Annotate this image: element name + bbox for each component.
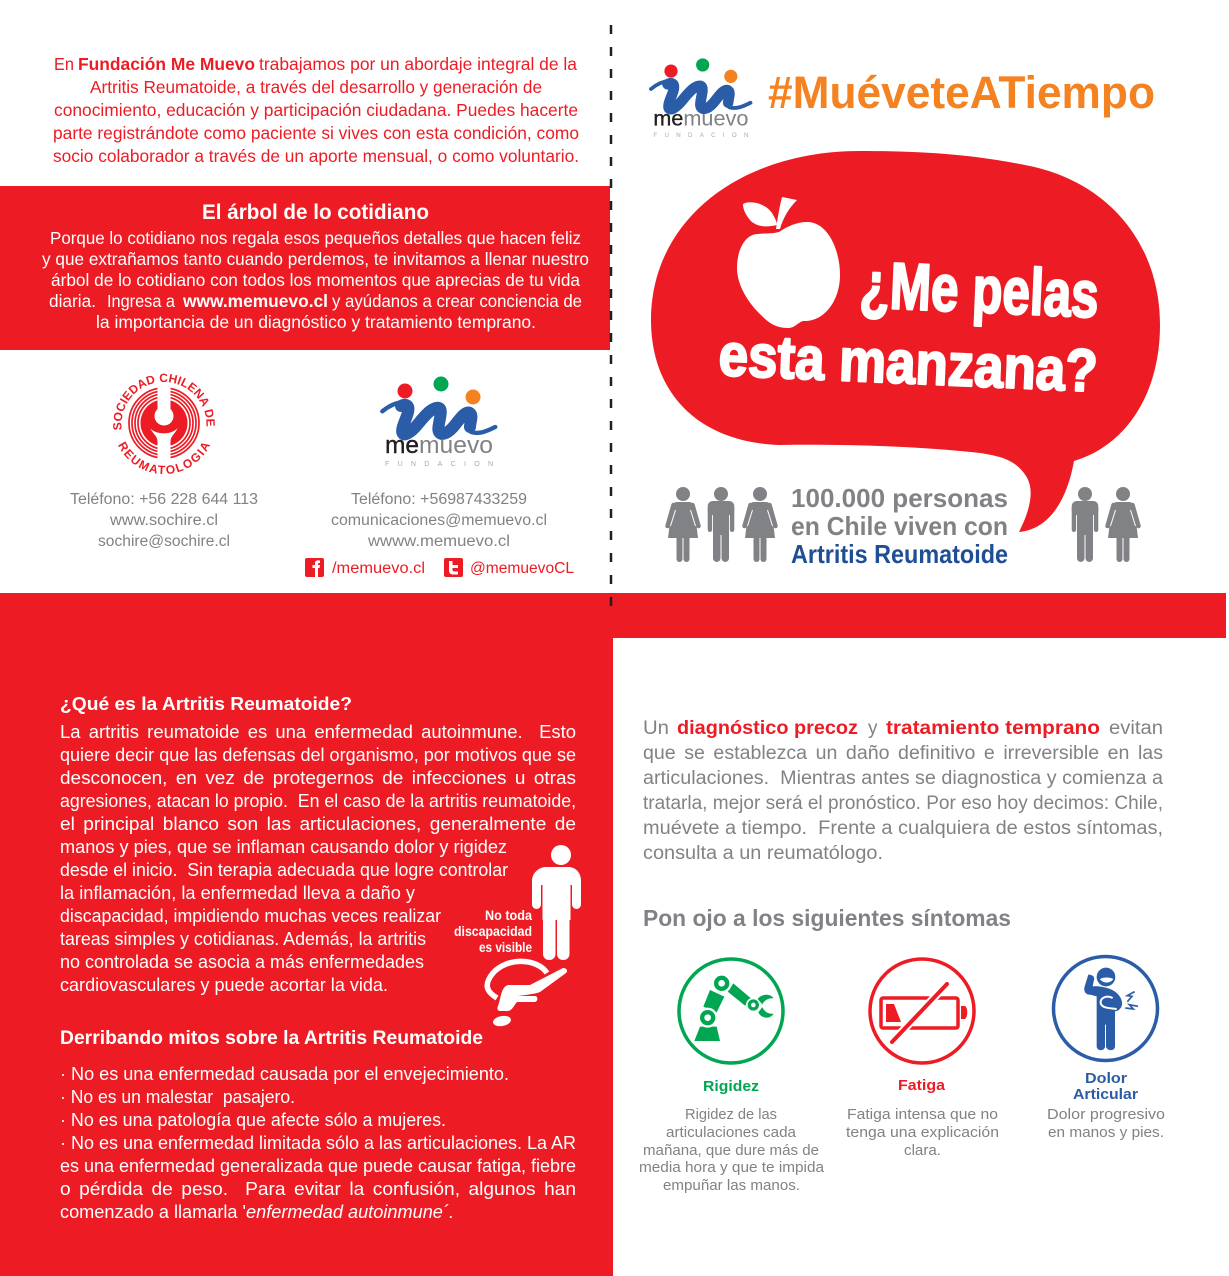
text: explanation of arthritis: agresiones, atacan lo propio. En el caso de la artritis reumatoide,: [60, 791, 576, 811]
contact: Me Muevo: Teléfono: +56987433259: [351, 491, 527, 508]
text: rigidity description: media hora y que te impida: [639, 1159, 825, 1176]
logo: Fundación Me Muevo small: muevo: [683, 108, 748, 131]
social: twitter: @memuevoCL: [470, 560, 574, 577]
contact: Sochire: www.sochire.cl: [109, 512, 218, 529]
text: early diagnosis paragraph: diagnóstico precoz: [677, 718, 858, 739]
logo: Fundación Me Muevo small: [651, 58, 750, 139]
icon: woman: [1108, 487, 1138, 562]
icon: people left group: [668, 487, 776, 562]
text: árbol description: [42, 228, 589, 332]
heading: Derribando mitos: Derribando mitos sobre la Artritis Reumatoide: [60, 1027, 483, 1049]
label: Dolor Articular: Articular: [1073, 1086, 1138, 1103]
text: explanation of arthritis: discapacidad, impidiendo muchas veces realizar: [60, 906, 441, 926]
label: Fatiga: Fatiga: [898, 1077, 946, 1094]
text: explanation of arthritis: no controlada se asocia a más enfermedades: [60, 952, 424, 972]
intro text block: Fundación Me Muevo: [78, 54, 255, 74]
label: Rigidez: Rigidez: [703, 1078, 759, 1095]
text: early diagnosis paragraph: Un: [643, 718, 669, 739]
social: facebook: [305, 558, 425, 577]
text: early diagnosis paragraph: [643, 718, 1163, 864]
heading: ¿Qué es la Artritis Reumatoide?: ¿Qué es la Artritis Reumatoide?: [60, 693, 352, 714]
icon: man: [708, 487, 734, 562]
text: joint pain description: en manos y pies.: [1048, 1124, 1164, 1141]
text: explanation of arthritis: quiere decir que las defensas del organismo, por motivos que se: [60, 745, 576, 765]
logo: Fundación Me Muevo large: [382, 376, 495, 468]
speech bubble: [651, 151, 1160, 532]
text: explanation of arthritis: la inflamación, la enfermedad lleva a daño y: [60, 883, 415, 903]
heading: El árbol de lo cotidiano: El árbol de lo cotidiano: [202, 201, 429, 224]
social: facebook: /memuevo.cl: [332, 560, 425, 577]
text: myths list: · No es un malestar pasajero.: [60, 1087, 295, 1107]
statistic: 100.000 personas: [791, 483, 1008, 569]
text: fatigue description: clara.: [904, 1142, 941, 1159]
headline: ¿Me pelas esta manzana?: [717, 247, 1100, 405]
text: early diagnosis paragraph: que se establezca un daño definitivo e irreversible en las: [643, 743, 1163, 764]
text: explanation of arthritis: cardiovasculares y puede acortar la vida.: [60, 975, 388, 995]
icon: woman: [668, 487, 698, 562]
text: explanation of arthritis: [60, 722, 576, 995]
logo: Fundación Me Muevo large: FUNDACION: [385, 461, 493, 468]
intro text block: parte registrándote como paciente si vives con esta condición, como: [53, 123, 579, 143]
text: rigidity description: articulaciones cada: [666, 1124, 797, 1141]
text: árbol description: y que extrañamos tanto cuando perdemos, te invitamos a llenar nuestro: [42, 249, 589, 269]
text: early diagnosis paragraph: tratarla, mejor será el pronóstico. Por eso hoy decimos: Chile,: [643, 793, 1163, 814]
icon: people right group: [1072, 487, 1138, 562]
panel: El árbol de lo cotidiano: [0, 186, 610, 350]
contact: Me Muevo: comunicaciones@memuevo.cl: [331, 512, 547, 529]
intro text block: conocimiento, educación y participación ciudadana. Puedes hacerte: [54, 100, 578, 120]
text: myths list: comenzado a llamarla ': [60, 1202, 246, 1222]
icon: rigidity robot arm: [679, 959, 783, 1063]
icon: woman: [744, 487, 776, 562]
panel: red band top of lower right: [613, 593, 1226, 638]
text: early diagnosis paragraph: muévete a tiempo. Frente a cualquiera de estos síntomas,: [643, 818, 1163, 839]
text: árbol description: www.memuevo.cl: [182, 291, 328, 311]
text: explanation of arthritis: La artritis reumatoide es una enfermedad autoinmune. Esto: [60, 722, 576, 742]
text: No toda discapacidad es visible: [454, 908, 532, 955]
contact: Sochire: Teléfono: +56 228 644 113: [70, 491, 258, 508]
logo: Fundación Me Muevo small: me: [653, 108, 683, 131]
text: myths list: · No es una enfermedad causada por el envejecimiento.: [60, 1064, 509, 1084]
text: joint pain description: [1047, 1106, 1165, 1141]
headline: ¿Me pelas esta manzana?: ¿Me pelas: [858, 247, 1100, 331]
icon: figure with question mark hand: [487, 845, 581, 1027]
icon: fatigue battery: [870, 959, 974, 1063]
contact: Me Muevo: [331, 491, 547, 550]
intro text block: trabajamos por un abordaje integral de la: [259, 54, 577, 74]
text: fatigue description: tenga una explicación: [846, 1124, 999, 1141]
label: Dolor Articular: Dolor: [1085, 1070, 1127, 1087]
text: árbol description: árbol de lo cotidiano con todos los momentos que aprecias de tu vida: [51, 270, 580, 290]
intro text block: [53, 54, 579, 166]
text: No toda discapacidad es visible: No toda: [485, 908, 532, 923]
statistic: 100.000 personas: Artritis Reumatoide: [791, 539, 1008, 569]
intro text block: socio colaborador a través de un aporte mensual, o como voluntario.: [53, 146, 579, 166]
logo: Fundación Me Muevo large: muevo: [419, 432, 493, 459]
text: rigidity description: Rigidez de las: [685, 1106, 777, 1123]
text: fatigue description: Fatiga intensa que no: [847, 1106, 998, 1123]
logo: Fundación Me Muevo large: me: [385, 432, 419, 459]
logo: Sociedad Chilena de Reumatología: [113, 374, 215, 474]
text: No toda discapacidad es visible: discapacidad: [454, 924, 532, 939]
icon: apple: [737, 197, 840, 328]
text: myths list: es una enfermedad generalizada que puede causar fatiga, fiebre: [60, 1156, 576, 1176]
text: rigidity description: mañana, que dure más de: [643, 1142, 819, 1159]
text: árbol description: y ayúdanos a crear conciencia de: [332, 291, 582, 311]
text: myths list: · No es una enfermedad limitada sólo a las articulaciones. La AR: [60, 1133, 576, 1153]
text: early diagnosis paragraph: consulta a un reumatólogo.: [643, 843, 883, 864]
panel: red lower left background: [0, 593, 613, 1276]
logo: Fundación Me Muevo small: FUNDACION: [653, 132, 748, 139]
text: joint pain description: Dolor progresivo: [1047, 1106, 1165, 1123]
text: early diagnosis paragraph: evitan: [1109, 718, 1163, 739]
icon: joint pain person: [1054, 956, 1158, 1060]
contact: Me Muevo: wwww.memuevo.cl: [367, 533, 510, 550]
icon: man: [1072, 487, 1098, 562]
text: árbol description: Porque lo cotidiano nos regala esos pequeños detalles que hacen feliz: [50, 228, 581, 248]
heading: Pon ojo a los siguientes síntomas: Pon ojo a los siguientes síntomas: [643, 905, 1011, 931]
statistic: 100.000 personas: 100.000 personas: [791, 483, 1008, 513]
logo: Sociedad Chilena de Reumatología: REUMATOLOGIA: [118, 441, 210, 474]
text: explanation of arthritis: desconocen, en vez de protegernos de infecciones u otras: [60, 768, 576, 788]
text: No toda discapacidad es visible: es visible: [479, 940, 532, 955]
text: explanation of arthritis: tareas simples y cotidianas. Además, la artritis: [60, 929, 426, 949]
text: árbol description: Ingresa a: [107, 291, 175, 311]
text: early diagnosis paragraph: y: [868, 718, 878, 739]
text: explanation of arthritis: manos y pies, que se inflaman causando dolor y rigidez: [60, 837, 507, 857]
dashed fold line: [610, 25, 612, 615]
hashtag title: #MuéveteATiempo: [768, 67, 1155, 118]
text: explanation of arthritis: desde el inicio. Sin terapia adecuada que logre controlar: [60, 860, 508, 880]
text: early diagnosis paragraph: tratamiento temprano: [886, 718, 1100, 739]
text: myths list: · No es una patología que afecte sólo a mujeres.: [60, 1110, 446, 1130]
text: early diagnosis paragraph: articulaciones. Mientras antes se diagnostica y comienza a: [643, 768, 1163, 789]
headline: ¿Me pelas esta manzana?: esta manzana?: [717, 321, 1099, 405]
text: rigidity description: empuñar las manos.: [663, 1177, 800, 1194]
statistic: 100.000 personas: en Chile viven con: [791, 511, 1008, 541]
text: myths list: enfermedad autoinmune´.: [246, 1202, 454, 1222]
contact: Sochire: sochire@sochire.cl: [98, 533, 230, 550]
label: Dolor Articular: [1073, 1070, 1138, 1103]
intro text block: Artritis Reumatoide, a través del desarrollo y generación de: [90, 77, 542, 97]
text: myths list: [60, 1064, 576, 1222]
logo: Sociedad Chilena de Reumatología: SOCIEDAD CHILENA DE: [113, 374, 215, 430]
text: árbol description: diaria.: [49, 291, 96, 311]
text: fatigue description: [846, 1106, 999, 1159]
contact: Sochire: [70, 491, 258, 550]
intro text block: En: [54, 54, 74, 74]
text: árbol description: la importancia de un diagnóstico y tratamiento temprano.: [96, 312, 536, 332]
text: rigidity description: [639, 1106, 825, 1194]
text: explanation of arthritis: el principal blanco son las articulaciones, generalmente de: [60, 814, 576, 834]
text: myths list: o pérdida de peso. Para evitar la confusión, algunos han: [60, 1179, 576, 1199]
